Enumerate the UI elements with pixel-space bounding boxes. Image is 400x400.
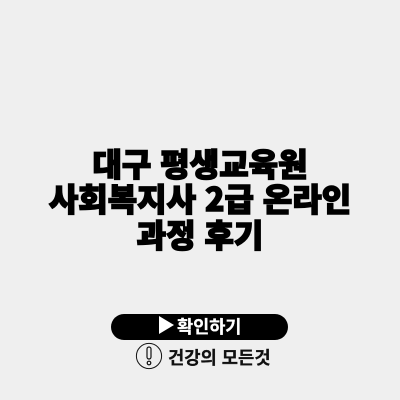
title: 사회복지사 2급 온라인 <box>49 175 351 221</box>
icon: play triangle <box>159 316 174 334</box>
title: 과정 후기 <box>137 211 263 257</box>
icon: exclamation circle <box>136 342 162 370</box>
title: 대구 평생교육원 <box>92 140 308 186</box>
button: 확인하기 <box>111 314 288 340</box>
title <box>48 140 351 257</box>
button label: 확인하기 <box>177 314 241 339</box>
brand: 건강의 모든것 <box>136 342 271 370</box>
brand label: 건강의 모든것 <box>168 344 271 370</box>
